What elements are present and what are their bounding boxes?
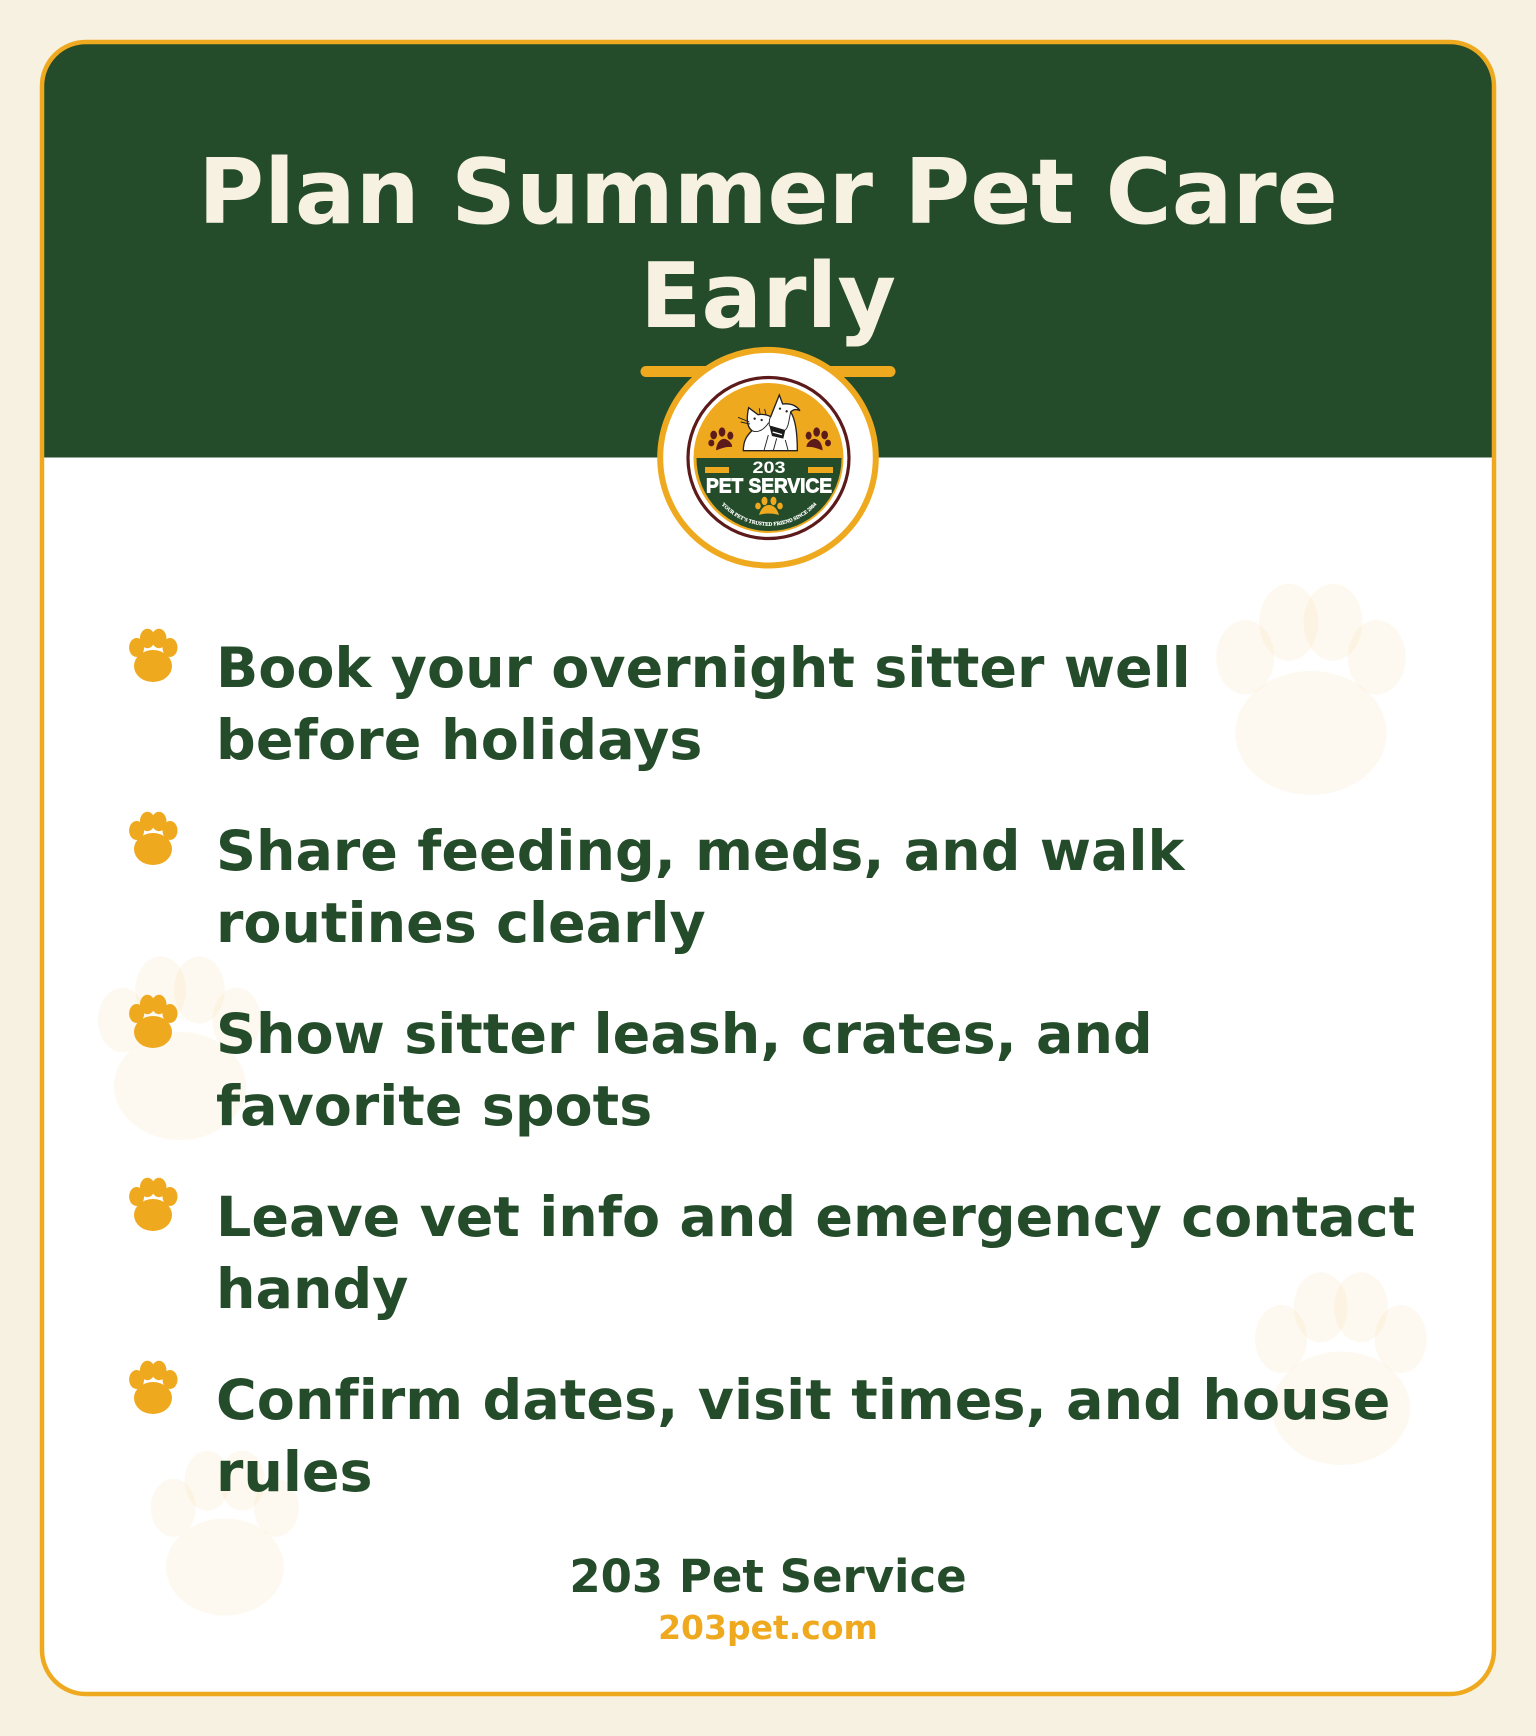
icon: paw bullet	[129, 1361, 178, 1414]
footer brand name: 203 Pet Service	[569, 1550, 967, 1603]
watermark paw: middle left	[98, 956, 261, 1140]
title: Early	[640, 244, 896, 349]
logo maroon paw left	[708, 427, 733, 450]
logo text pet service: PET SERVICE	[706, 474, 832, 498]
title underline	[640, 366, 896, 377]
logo gold paw	[755, 497, 783, 515]
logo maroon paw right	[806, 427, 831, 450]
watermark paw: lower left	[151, 1451, 299, 1616]
list item 5: Confirm dates, visit times, and house	[216, 1368, 1390, 1433]
icon: paw bullet	[129, 812, 178, 865]
logo badge	[657, 346, 879, 568]
logo gold bars	[705, 467, 833, 473]
logo tagline: YOUR PET'S TRUSTED FRIEND SINCE 2004	[722, 502, 816, 526]
icon: paw bullet	[129, 1178, 178, 1231]
list item 5	[129, 1361, 1391, 1505]
title	[198, 140, 1338, 349]
logo text 203: 203	[752, 459, 786, 477]
icon: paw bullet	[129, 629, 178, 682]
list item 3	[129, 995, 1153, 1139]
title: Plan Summer Pet Care	[198, 140, 1338, 245]
list item 1: before holidays	[216, 708, 703, 773]
watermark paw: upper right	[1216, 584, 1406, 795]
list item 4: handy	[216, 1257, 408, 1322]
list item 3: Show sitter leash, crates, and	[216, 1002, 1153, 1067]
list item 1	[129, 629, 1191, 773]
list item 2: routines clearly	[216, 891, 706, 956]
footer website: 203pet.com	[658, 1608, 878, 1647]
header band	[42, 42, 1494, 458]
logo cat and dog	[738, 395, 800, 451]
watermark paw: lower right	[1255, 1272, 1427, 1465]
icon: paw bullet	[129, 995, 178, 1048]
list item 2: Share feeding, meds, and walk	[216, 819, 1185, 884]
list item 5: rules	[216, 1440, 373, 1505]
list item 4: Leave vet info and emergency contact	[216, 1185, 1415, 1250]
list item 4	[129, 1178, 1415, 1322]
list item 1: Book your overnight sitter well	[216, 636, 1191, 701]
list item 2	[129, 812, 1185, 956]
list item 3: favorite spots	[216, 1074, 652, 1139]
